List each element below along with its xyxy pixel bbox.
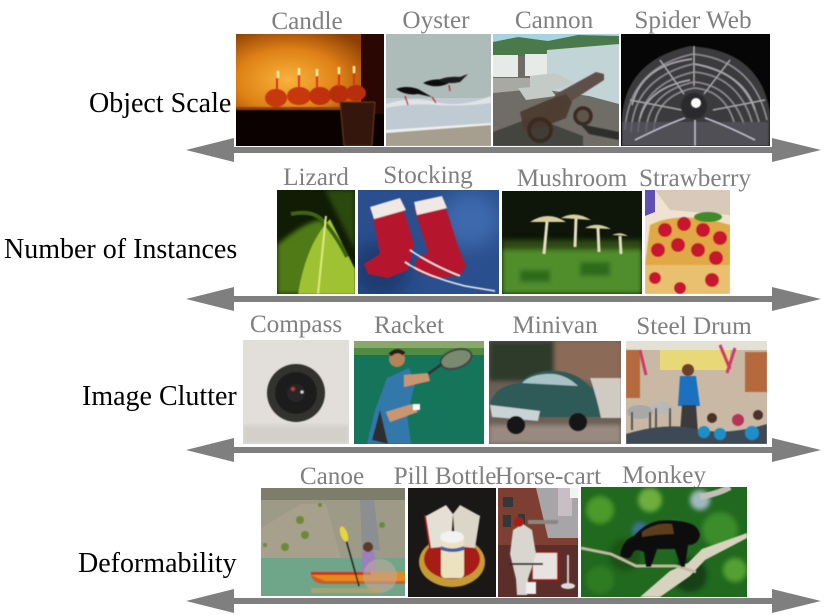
photo: oyster [386,34,491,146]
photo: canoe [261,488,405,596]
label: Racket: Racket [374,312,444,339]
row label: Number of Instances: Number of Instances [4,234,237,265]
photo: candle [236,34,384,146]
photo: cannon [493,34,619,146]
label: Compass: Compass [250,311,342,338]
label: Oyster: Oyster [402,7,470,34]
arrow: row 4 [186,589,821,613]
label: Steel Drum: Steel Drum [636,313,752,340]
label: Canoe: Canoe [300,463,364,490]
photo: strawberry [645,190,730,294]
label: Monkey: Monkey [622,462,706,489]
photo: spider web [621,34,770,146]
photo: minivan [489,341,621,444]
arrow: row 2 [186,287,821,311]
arrow: row 3 [186,438,821,462]
row label: Image Clutter: Image Clutter [82,381,237,412]
photo: horse-cart [498,488,578,597]
label: Candle: Candle [271,8,343,35]
label: Horse-cart: Horse-cart [495,463,601,490]
label: Pill Bottle: Pill Bottle [394,463,496,490]
photo: pill bottle [408,488,496,597]
photo: monkey [581,487,747,597]
label: Minivan: Minivan [512,312,598,339]
label: Lizard: Lizard [283,164,349,191]
label: Mushroom: Mushroom [517,165,628,192]
label: Cannon: Cannon [515,7,594,34]
photo: steel drum [626,341,767,444]
photo: compass [243,340,349,444]
photo: racket [354,341,484,444]
photo: stocking [358,190,499,294]
label: Strawberry: Strawberry [639,165,751,192]
photo: mushroom [502,191,642,294]
row label: Deformability: Deformability [78,548,237,579]
label: Stocking: Stocking [383,162,473,189]
photo: lizard [277,190,355,294]
arrow: row 1 [186,138,821,162]
label: Spider Web: Spider Web [634,7,752,34]
row label: Object Scale: Object Scale [89,88,231,119]
